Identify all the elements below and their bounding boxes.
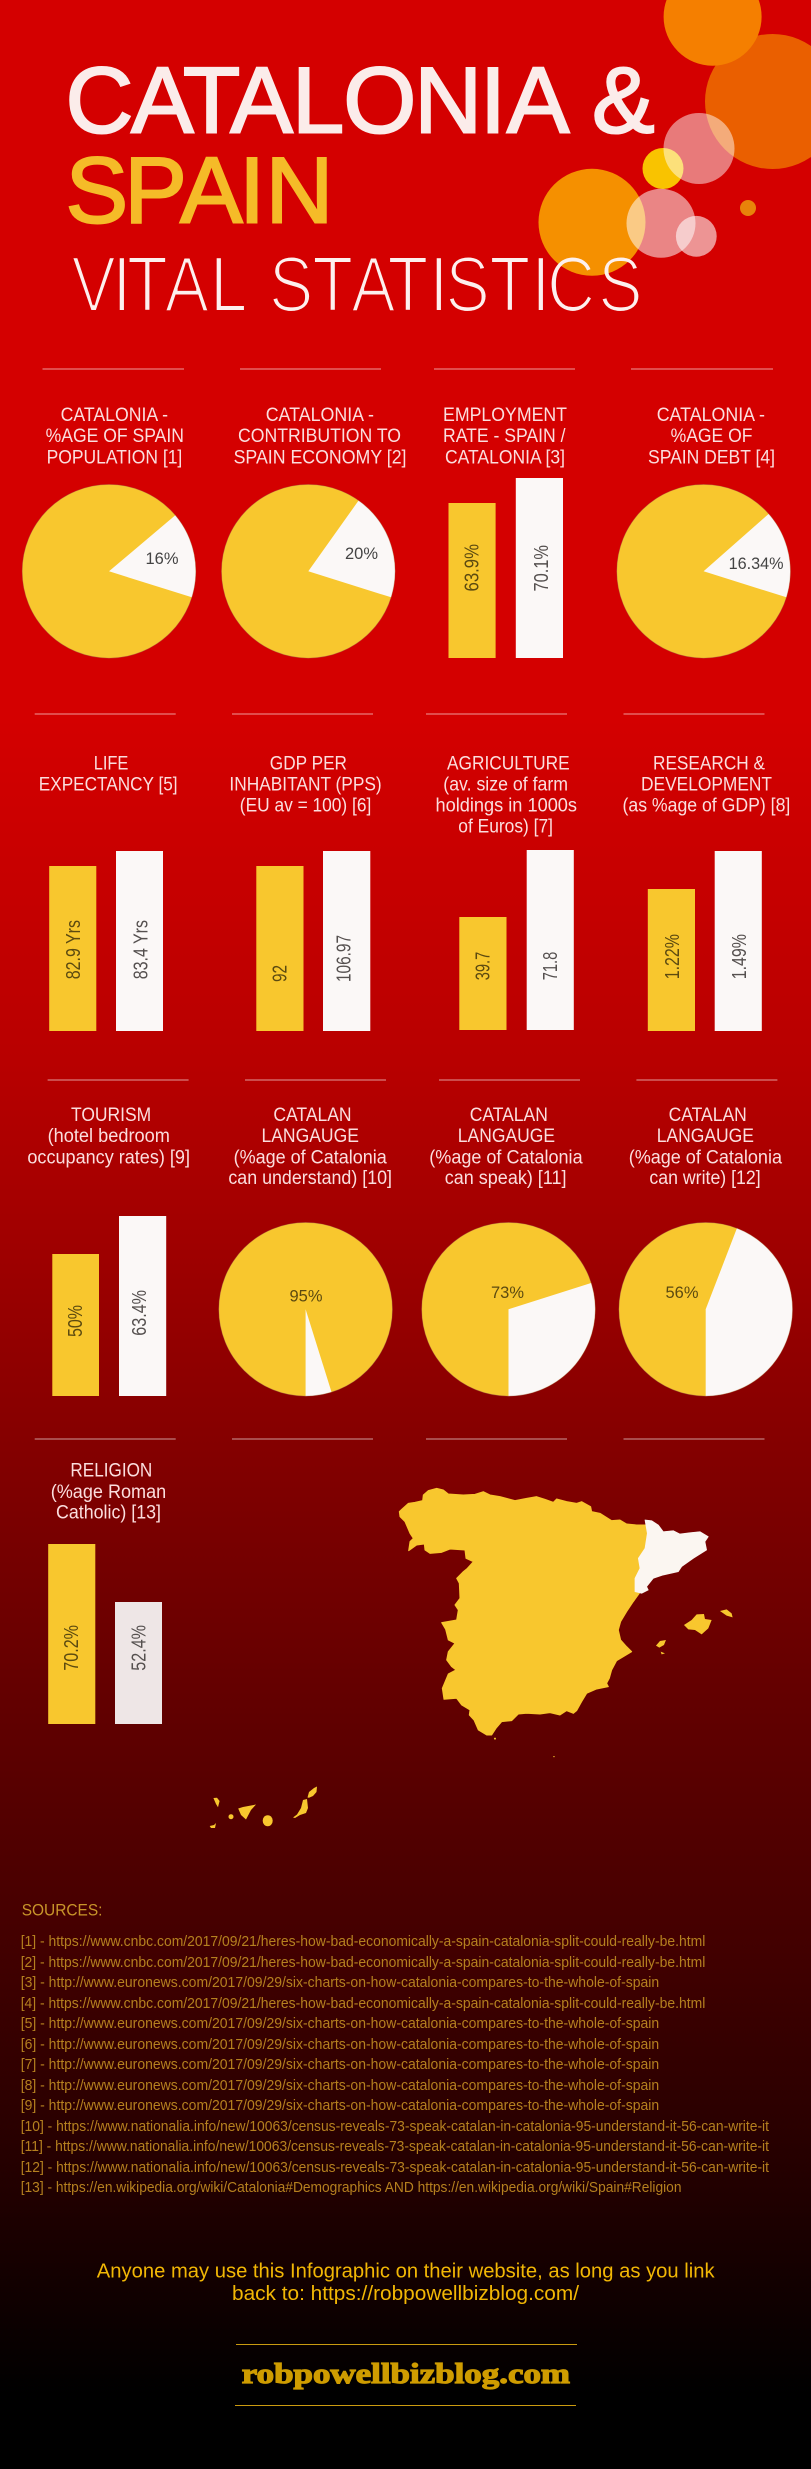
panel: employment bbox=[443, 405, 567, 658]
heading: employment: RATE - SPAIN / bbox=[443, 426, 566, 447]
heading: research: DEVELOPMENT bbox=[641, 774, 772, 795]
panel: life expectancy bbox=[39, 753, 178, 1031]
panel: Catalan understand bbox=[219, 1105, 392, 1396]
sources list: [12] - https://www.nationalia.info/new/10063/census-reveals-73-speak-catalan-in-catalonia-95-understand-it-56-can-write-it bbox=[21, 2159, 770, 2176]
sources list bbox=[21, 1902, 770, 2196]
heading: write: can write) [12] bbox=[649, 1168, 761, 1189]
heading: research: RESEARCH & bbox=[653, 753, 765, 774]
heading: speak: CATALAN bbox=[470, 1105, 548, 1126]
heading: religion: (%age Roman bbox=[51, 1482, 166, 1503]
bar chart: agriculture bbox=[459, 850, 574, 1030]
heading: understand: (%age of Catalonia bbox=[234, 1147, 387, 1168]
panel: research and development bbox=[622, 753, 790, 1031]
heading: write: LANGAUGE bbox=[657, 1126, 754, 1147]
sources list: [9] - http://www.euronews.com/2017/09/29/six-charts-on-how-catalonia-compares-to-the-whole-of-spain bbox=[21, 2097, 659, 2114]
sources list: [11] - https://www.nationalia.info/new/10063/census-reveals-73-speak-catalan-in-catalonia-95-understand-it-56-can-write-it bbox=[21, 2138, 770, 2155]
bar chart: tourism: 63.4% bbox=[129, 1290, 151, 1336]
heading: economy: SPAIN ECONOMY [2] bbox=[234, 447, 406, 468]
bar chart: research bbox=[648, 851, 762, 1031]
bar chart: agriculture: 71.8 bbox=[540, 952, 562, 980]
sources list: [8] - http://www.euronews.com/2017/09/29/six-charts-on-how-catalonia-compares-to-the-whole-of-spain bbox=[21, 2077, 659, 2094]
panel: Catalan write bbox=[619, 1105, 793, 1396]
pie chart: 16% bbox=[22, 484, 196, 658]
heading: understand bbox=[228, 1105, 392, 1189]
pie chart: 16.34%: 16.34% bbox=[729, 554, 784, 573]
heading: research: (as %age of GDP) [8] bbox=[622, 796, 790, 817]
sources list: [6] - http://www.euronews.com/2017/09/29/six-charts-on-how-catalonia-compares-to-the-whole-of-spain bbox=[21, 2036, 659, 2053]
heading: write bbox=[629, 1105, 782, 1189]
pie chart: 95%: 95% bbox=[290, 1286, 322, 1305]
footer brand: robpowellbizblog.com bbox=[242, 2359, 570, 2390]
heading: population bbox=[46, 405, 184, 468]
sources list: [10] - https://www.nationalia.info/new/10063/census-reveals-73-speak-catalan-in-catalonia-95-understand-it-56-can-write-it bbox=[21, 2118, 770, 2135]
pie chart: 16.34% bbox=[617, 484, 790, 658]
panel: Catalan speak bbox=[422, 1105, 595, 1396]
bar chart: employment: 63.9% bbox=[462, 544, 484, 592]
heading: employment: EMPLOYMENT bbox=[443, 405, 567, 426]
heading: speak: LANGAUGE bbox=[458, 1126, 555, 1147]
heading: debt bbox=[648, 405, 775, 468]
heading: debt: SPAIN DEBT [4] bbox=[648, 447, 775, 468]
heading: tourism: TOURISM bbox=[71, 1105, 151, 1126]
bar chart: employment: 70.1% bbox=[531, 545, 553, 592]
bar chart: research: 1.22% bbox=[662, 934, 684, 979]
bar chart: GDP: 92 bbox=[269, 965, 291, 982]
pie chart: 95% bbox=[219, 1222, 392, 1396]
heading: life expectancy: LIFE bbox=[94, 753, 128, 774]
heading: research bbox=[622, 753, 790, 817]
panel: agriculture bbox=[436, 753, 577, 1030]
usage notice: back to: https://robpowellbizblog.com/ bbox=[232, 2283, 579, 2305]
pie chart: 56% bbox=[619, 1222, 793, 1396]
heading: GDP: INHABITANT (PPS) bbox=[229, 774, 382, 795]
panel: population share bbox=[22, 405, 196, 658]
heading: economy: CONTRIBUTION TO bbox=[238, 426, 401, 447]
bar chart: GDP: 106.97 bbox=[334, 935, 356, 982]
usage notice bbox=[97, 2260, 716, 2305]
heading: debt: %AGE OF bbox=[671, 426, 752, 447]
pie chart: 73% bbox=[422, 1222, 595, 1396]
heading: agriculture: (av. size of farm bbox=[443, 774, 568, 795]
mainland Spain bbox=[399, 1488, 647, 1735]
panel: tourism bbox=[27, 1105, 190, 1396]
Catalonia bbox=[635, 1520, 708, 1593]
heading: write: (%age of Catalonia bbox=[629, 1147, 782, 1168]
pie chart: 56%: 56% bbox=[666, 1283, 698, 1302]
pie chart: 73%: 73% bbox=[491, 1283, 524, 1302]
bar chart: religion bbox=[48, 1544, 162, 1724]
heading: employment bbox=[443, 405, 567, 468]
sources list: [3] - http://www.euronews.com/2017/09/29/six-charts-on-how-catalonia-compares-to-the-whole-of-spain bbox=[21, 1974, 659, 1991]
title bbox=[66, 48, 655, 328]
heading: economy: CATALONIA - bbox=[266, 405, 374, 426]
heading: understand: LANGAUGE bbox=[262, 1126, 359, 1147]
panel: debt share bbox=[617, 405, 790, 658]
heading: tourism bbox=[27, 1105, 190, 1168]
title: CATALONIA & bbox=[66, 48, 655, 153]
title: SPAIN bbox=[66, 138, 333, 243]
title: VITAL STATISTICS bbox=[71, 241, 643, 328]
panel: GDP per inhabitant bbox=[229, 753, 382, 1031]
bar chart: religion: 70.2% bbox=[61, 1625, 83, 1671]
usage notice: Anyone may use this Infographic on their website, as long as you link bbox=[97, 2260, 716, 2282]
bar chart: life expectancy bbox=[49, 851, 163, 1031]
sources list: [5] - http://www.euronews.com/2017/09/29/six-charts-on-how-catalonia-compares-to-the-whole-of-spain bbox=[21, 2015, 659, 2032]
pie chart: 16%: 16% bbox=[146, 549, 178, 568]
heading: religion: Catholic) [13] bbox=[56, 1503, 161, 1524]
heading: tourism: (hotel bedroom bbox=[48, 1126, 170, 1147]
heading: GDP: GDP PER bbox=[270, 753, 347, 774]
bar chart: tourism: 50% bbox=[65, 1305, 87, 1337]
bar chart: religion: 52.4% bbox=[129, 1625, 151, 1671]
pie chart: 20%: 20% bbox=[345, 544, 378, 563]
pie chart: 20% bbox=[221, 484, 395, 658]
bar chart: GDP bbox=[256, 851, 370, 1031]
sources list: [7] - http://www.euronews.com/2017/09/29/six-charts-on-how-catalonia-compares-to-the-whole-of-spain bbox=[21, 2056, 659, 2073]
section dividers bbox=[35, 368, 777, 1440]
heading: population: POPULATION [1] bbox=[47, 447, 182, 468]
decorative bubbles bbox=[538, 0, 811, 276]
Balearic Islands, Ceuta and Melilla bbox=[494, 1609, 733, 1757]
heading: life expectancy bbox=[39, 753, 178, 795]
heading: agriculture: holdings in 1000s bbox=[436, 796, 577, 817]
heading: speak: can speak) [11] bbox=[445, 1168, 566, 1189]
sources list: [4] - https://www.cnbc.com/2017/09/21/heres-how-bad-economically-a-spain-catalonia-split-could-really-be.html bbox=[21, 1995, 705, 2012]
heading: life expectancy: EXPECTANCY [5] bbox=[39, 774, 178, 795]
heading: agriculture bbox=[436, 753, 577, 838]
heading: employment: CATALONIA [3] bbox=[445, 447, 565, 468]
sources heading: SOURCES: bbox=[22, 1902, 103, 1920]
heading: agriculture: AGRICULTURE bbox=[447, 753, 570, 774]
bar chart: life expectancy: 82.9 Yrs bbox=[63, 920, 85, 979]
map of Spain with Catalonia highlighted bbox=[210, 1488, 733, 1828]
bar chart: research: 1.49% bbox=[729, 934, 751, 979]
bar chart: agriculture: 39.7 bbox=[472, 952, 494, 980]
heading: speak: (%age of Catalonia bbox=[429, 1147, 583, 1168]
heading: understand: can understand) [10] bbox=[228, 1168, 392, 1189]
Canary Islands bbox=[210, 1786, 317, 1828]
sources list: [13] - https://en.wikipedia.org/wiki/Catalonia#Demographics AND https://en.wikipedia.org/wiki/Spain#Religion bbox=[21, 2179, 681, 2196]
heading: economy bbox=[234, 405, 406, 468]
heading: understand: CATALAN bbox=[273, 1105, 352, 1126]
panel: economy contribution bbox=[221, 405, 406, 658]
heading: religion: RELIGION bbox=[70, 1461, 152, 1482]
heading: debt: CATALONIA - bbox=[657, 405, 765, 426]
heading: GDP: (EU av = 100) [6] bbox=[240, 796, 371, 817]
sources list: [1] - https://www.cnbc.com/2017/09/21/heres-how-bad-economically-a-spain-catalonia-split-could-really-be.html bbox=[21, 1933, 705, 1950]
bar chart: tourism bbox=[52, 1216, 166, 1396]
heading: speak bbox=[429, 1105, 583, 1189]
heading: religion bbox=[51, 1461, 166, 1524]
bar chart: employment bbox=[448, 478, 563, 658]
heading: agriculture: of Euros) [7] bbox=[458, 817, 553, 838]
heading: tourism: occupancy rates) [9] bbox=[27, 1147, 190, 1168]
heading: GDP bbox=[229, 753, 382, 817]
heading: population: CATALONIA - bbox=[61, 405, 168, 426]
sources list: [2] - https://www.cnbc.com/2017/09/21/heres-how-bad-economically-a-spain-catalonia-split-could-really-be.html bbox=[21, 1954, 705, 1971]
panel: religion bbox=[48, 1461, 166, 1724]
heading: write: CATALAN bbox=[669, 1105, 747, 1126]
heading: population: %AGE OF SPAIN bbox=[46, 426, 184, 447]
bar chart: life expectancy: 83.4 Yrs bbox=[131, 920, 153, 979]
